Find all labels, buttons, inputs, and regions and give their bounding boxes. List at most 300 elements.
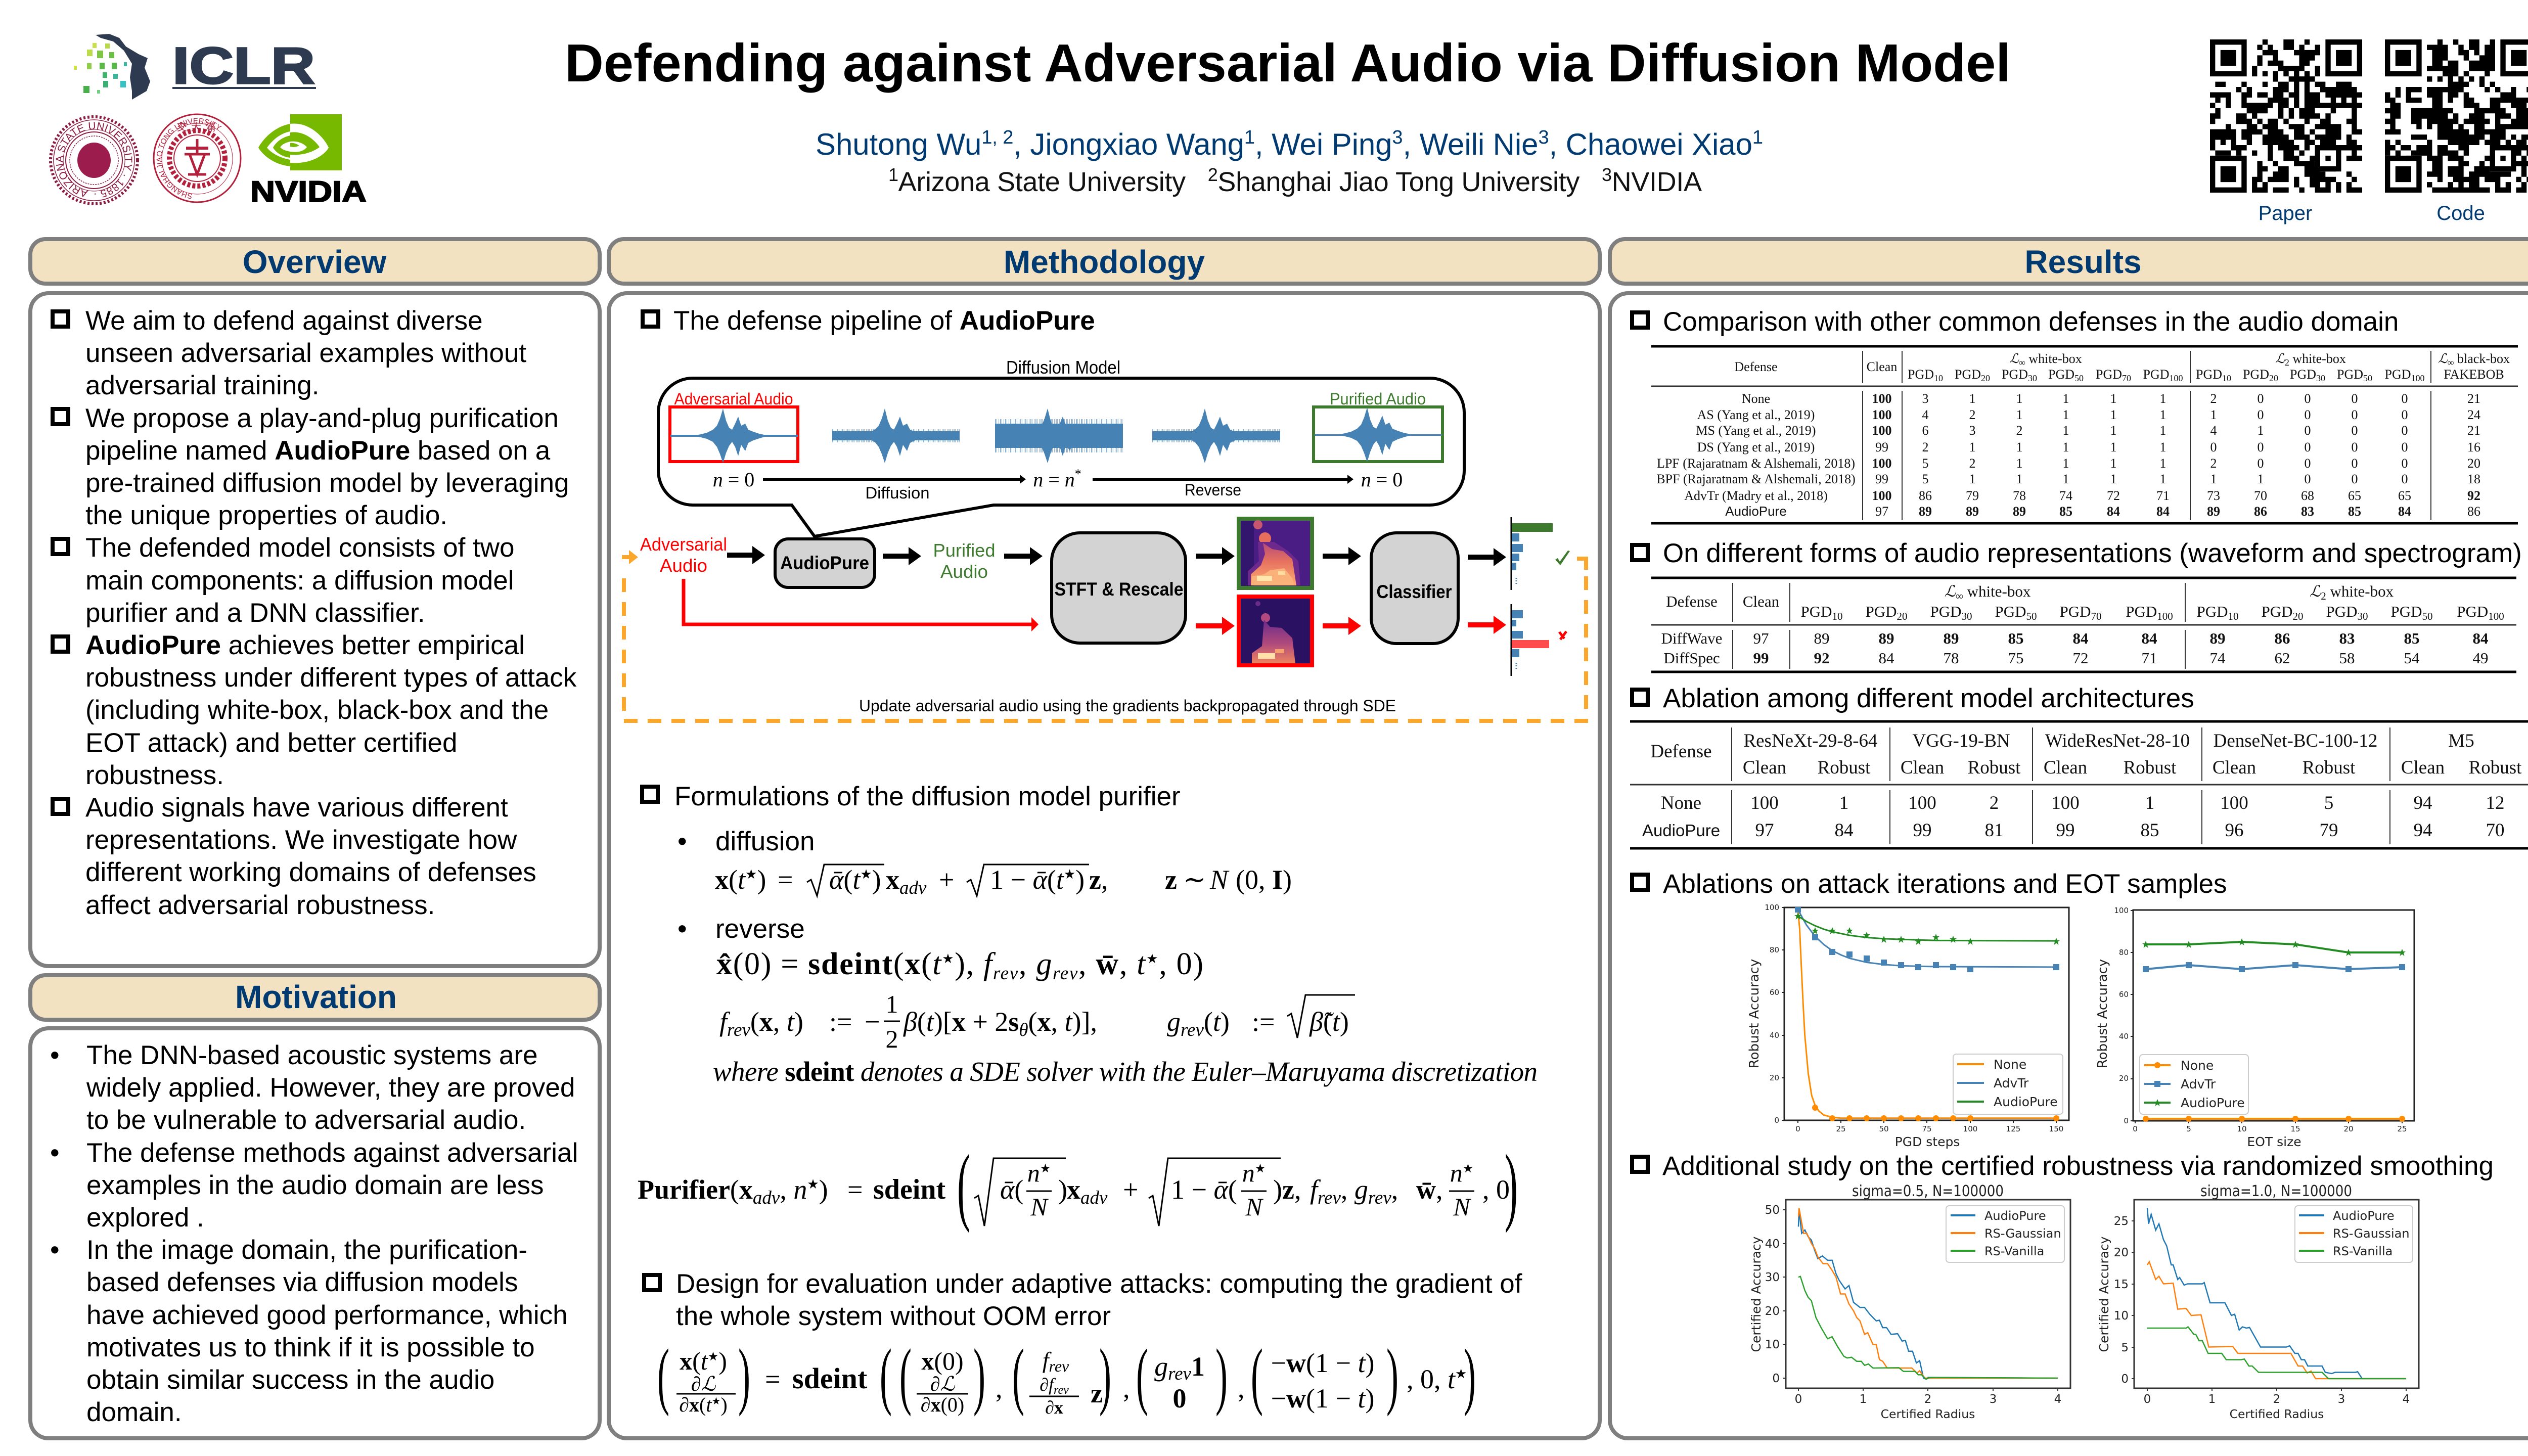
table: comparison: 1 — [2063, 472, 2069, 486]
formula: reverse drift and diffusion: ( — [1204, 1007, 1213, 1037]
formula: augmented SDE: rev — [1168, 1363, 1192, 1384]
table: comparison: 85 — [2059, 504, 2072, 519]
table: comparison: 21 — [2467, 423, 2480, 438]
formula: augmented SDE: −w(1 − t) — [1271, 1348, 1374, 1378]
table: comparison: 100 — [2170, 373, 2183, 383]
legend: sigma 0.5 — [1946, 1206, 2064, 1262]
table: representations: 84 — [1879, 649, 1894, 667]
formula: diffusion — [715, 864, 1292, 898]
formula: augmented SDE: ∂ℒ — [691, 1373, 716, 1395]
table: comparison: 100 — [1872, 391, 1892, 406]
table: representations: 83 — [2339, 629, 2355, 647]
table: comparison: None — [1742, 391, 1770, 406]
table: representations: 99 — [1753, 649, 1769, 667]
table: comparison: 20 — [2467, 456, 2480, 471]
table: architectures: Clean — [1743, 757, 1786, 778]
label: Diffusion Model: Diffusion Model — [1006, 357, 1120, 378]
text block: motivation bullets: • — [50, 1235, 60, 1265]
formula: purifier: f — [1310, 1174, 1321, 1205]
legend: sigma 1.0: RS-Vanilla — [2333, 1244, 2392, 1258]
table: comparison: ℒ — [2009, 351, 2019, 366]
text block: motivation bullets: obtain similar success in the audio — [86, 1365, 494, 1395]
table: comparison: 74 — [2059, 488, 2072, 503]
table: representations: 84 — [2472, 629, 2489, 647]
table: comparison: 1 — [2016, 407, 2022, 422]
formula: purifier: ) — [1058, 1174, 1067, 1205]
section heading: adaptive attacks: the whole system without OOM error — [676, 1301, 1111, 1331]
table: representations: 100 — [2488, 610, 2504, 622]
section heading: certified robustness: Additional study on the certified robustness via randomized smoothing — [1662, 1151, 2494, 1181]
table: architectures: Robust — [1968, 757, 2021, 778]
table: comparison: 70 — [2254, 488, 2267, 503]
formula: purifier: ★ — [1463, 1162, 1473, 1175]
label: purified audio wave: Purified Audio — [1330, 390, 1426, 408]
formula: diffusion: z — [1089, 864, 1101, 895]
table: comparison: PGD — [2196, 367, 2222, 382]
line chart: sigma 1.0: 0 — [2144, 1393, 2151, 1406]
formula: reverse drift and diffusion: β̃ — [1309, 1007, 1334, 1037]
section heading: pipeline: The defense pipeline of AudioPure — [673, 306, 1095, 336]
formula: purifier: ᾱ — [1000, 1174, 1015, 1205]
table: comparison: 4 — [2210, 423, 2217, 438]
box: Classifier — [1371, 533, 1458, 644]
caption: update rule: Update adversarial audio using the gradients backpropagated through SDE — [859, 697, 1396, 715]
table: representations: 78 — [1944, 649, 1959, 667]
table: comparison: 1 — [2063, 440, 2069, 454]
table: comparison: 0 — [2351, 407, 2358, 422]
table: representations: PGD — [2126, 603, 2157, 620]
icon: Shanghai Jiao Tong University seal: 交大滿 — [177, 121, 219, 133]
table: comparison: ∞ — [2448, 357, 2454, 368]
table: representations: PGD — [2261, 603, 2293, 620]
text block: motivation bullets: motivates us to think if it is possible to — [86, 1333, 535, 1362]
formula: reverse sdeint: , 0) — [1159, 947, 1203, 981]
table: comparison: 85 — [2348, 504, 2361, 519]
legend: EOT chart: AdvTr — [2181, 1077, 2216, 1091]
text block: motivation bullets: to be vulnerable to adversarial audio. — [86, 1105, 526, 1135]
table: comparison: PGD — [2243, 367, 2269, 382]
title: Defending against Adversarial Audio via Diffusion Model — [565, 33, 2011, 93]
table: comparison: 1 — [2160, 423, 2166, 438]
table: comparison: white-box — [2289, 351, 2346, 366]
formula: purifier: + — [1123, 1174, 1138, 1205]
text block: motivation bullets: The defense methods against adversarial — [86, 1138, 578, 1168]
line chart: PGD steps: 60 — [1770, 988, 1779, 997]
text block: overview bullets: Audio signals have various different — [85, 793, 508, 823]
table: comparison: PGD — [1955, 367, 1981, 382]
table: representations: PGD — [2390, 603, 2422, 620]
line chart: sigma 0.5: 2 — [1924, 1393, 1931, 1406]
table: architectures: 84 — [1834, 820, 1854, 841]
authors: Shutong Wu — [816, 127, 981, 161]
icon: ICLR logo — [74, 34, 316, 100]
formula: diffusion: z — [1165, 864, 1177, 895]
formula: reverse drift and diffusion: := — [1252, 1007, 1275, 1037]
table: comparison: PGD — [2048, 367, 2074, 382]
authors: , Chaowei Xiao — [1549, 127, 1752, 161]
table: representations: PGD — [1930, 603, 1962, 620]
formula: purifier: ᾱ( — [1213, 1174, 1237, 1205]
table: comparison: BPF (Rajaratnam & Alshemali, 2018) — [1656, 472, 1856, 486]
table: comparison: 2 — [2210, 391, 2217, 406]
table: representations: white-box — [1963, 582, 2031, 600]
formula: purifier: x — [1067, 1174, 1080, 1205]
table: comparison: DS (Yang et al., 2019) — [1697, 440, 1815, 454]
text: reverse bullet: • — [678, 914, 687, 944]
table: comparison: 1 — [1969, 440, 1976, 454]
table: representations: 62 — [2274, 649, 2290, 667]
table: representations: PGD — [2059, 603, 2091, 620]
text block: overview bullets: purifier and a DNN classifier. — [85, 598, 425, 628]
formula: purifier: g — [1355, 1174, 1368, 1205]
line chart: EOT size: 15 — [2290, 1124, 2300, 1133]
table: representations: Defense — [1666, 593, 1718, 610]
line chart: EOT size: EOT size — [2247, 1134, 2301, 1149]
formula: reverse sdeint: w̄, t — [1096, 947, 1146, 981]
formula: purifier: N — [1245, 1193, 1263, 1221]
table: comparison: 89 — [1919, 504, 1932, 519]
table: comparison: AudioPure — [1725, 504, 1787, 519]
table: comparison: 100 — [1872, 488, 1892, 503]
table: comparison: 1 — [2063, 407, 2069, 422]
table: comparison: 99 — [1875, 440, 1888, 454]
line chart: PGD steps: 20 — [1770, 1073, 1779, 1082]
table: architectures: 85 — [2141, 820, 2159, 841]
text block: motivation bullets: examples in the audio domain are less — [86, 1170, 544, 1200]
text block: overview bullets: the unique properties of audio. — [85, 500, 447, 530]
authors: 3 — [1392, 127, 1403, 148]
table: comparison: 1 — [2063, 423, 2069, 438]
icon: NVIDIA logo — [250, 114, 367, 208]
line chart: PGD steps: Robust Accuracy — [1747, 959, 1762, 1068]
authors: 1, 2 — [981, 127, 1013, 148]
table: representations: 10 — [2228, 610, 2239, 622]
section heading: attack iterations: Ablations on attack iterations and EOT samples — [1663, 869, 2227, 899]
arrow: classifier to purified output — [1468, 548, 1506, 566]
table: comparison: 18 — [2467, 472, 2480, 486]
timeline: diffusion and reverse — [713, 467, 1403, 502]
formula: diffusion: ∼ — [1183, 864, 1206, 895]
table: architectures: WideResNet-28-10 — [2045, 731, 2190, 751]
formula: augmented SDE: t — [1448, 1364, 1456, 1394]
panel: Results — [1610, 293, 2528, 1438]
text block: motivation bullets: widely applied. However, they are proved — [86, 1073, 575, 1103]
table: comparison: 0 — [2402, 407, 2408, 422]
text block: overview bullets: pre-trained diffusion model by leveraging — [85, 468, 569, 498]
table: comparison: 30 — [2316, 373, 2325, 383]
formula: augmented SDE: rev — [1049, 1357, 1069, 1375]
line chart: PGD steps: 40 — [1770, 1031, 1779, 1040]
table: architectures: 94 — [2414, 793, 2432, 813]
table: comparison: PGD — [2002, 367, 2028, 382]
formula: augmented SDE: ) — [720, 1393, 728, 1416]
line chart: EOT size: 80 — [2119, 948, 2129, 957]
table: architectures: 2 — [1990, 793, 1999, 813]
table: comparison: 79 — [1966, 488, 1979, 503]
formula: augmented SDE: , 0, — [1407, 1364, 1448, 1394]
table: architectures: 100 — [2051, 793, 2080, 813]
icon: NVIDIA logo: NVIDIA — [250, 175, 367, 208]
formula: purifier: ) — [819, 1174, 828, 1205]
formula: purifier: Purifier — [638, 1174, 730, 1205]
table: representations — [1651, 578, 2516, 672]
formula: augmented SDE: ) — [1386, 1334, 1398, 1417]
table: representations: 89 — [1814, 629, 1829, 647]
line chart: sigma 1.0 — [2097, 1182, 2419, 1421]
table: comparison: 0 — [2351, 440, 2358, 454]
table: comparison: 65 — [2398, 488, 2411, 503]
table: comparison: 1 — [2160, 472, 2166, 486]
formula: diffusion: (0, — [1236, 864, 1272, 895]
table: comparison: 1 — [2160, 440, 2166, 454]
table: comparison — [1651, 346, 2518, 523]
table: architectures: 1 — [1839, 793, 1848, 813]
table: representations: 100 — [2157, 610, 2173, 622]
line chart: sigma 1.0: 10 — [2114, 1309, 2129, 1323]
formula: augmented SDE: ∂f — [1040, 1375, 1056, 1395]
formula: reverse sdeint: rev — [1053, 963, 1078, 984]
text block: overview bullets: (including white-box, black-box and the — [85, 695, 549, 725]
table: architectures: Clean — [2044, 757, 2087, 778]
table: architectures: Clean — [2213, 757, 2256, 778]
formula: reverse drift and diffusion — [719, 990, 1355, 1053]
table: representations: 50 — [2422, 610, 2433, 622]
table: architectures: 99 — [2056, 820, 2075, 841]
formula: purifier: ★ — [1255, 1162, 1266, 1175]
table: comparison: 0 — [2351, 423, 2358, 438]
text block: motivation bullets: based defenses via diffusion models — [86, 1267, 518, 1297]
table: comparison: 1 — [2210, 407, 2217, 422]
formula: augmented SDE: , — [1123, 1373, 1130, 1403]
arrow: AudioPure to purified — [883, 547, 921, 565]
formula: augmented SDE: ★ — [1455, 1367, 1467, 1381]
panel: Methodology — [609, 293, 1600, 1438]
spectrogram: adversarial — [1239, 597, 1312, 665]
formula: augmented SDE: ★ — [708, 1350, 718, 1363]
formula: reverse sdeint: g — [1036, 947, 1052, 981]
formula: augmented SDE: ) — [973, 1334, 985, 1417]
formula: diffusion: x — [886, 864, 899, 895]
legend: PGD chart: AdvTr — [1994, 1076, 2029, 1090]
formula: diffusion: + — [939, 864, 954, 895]
table: architectures: Robust — [2124, 757, 2177, 778]
table: representations: 30 — [1962, 610, 1972, 622]
table: comparison: 1 — [2160, 391, 2166, 406]
table: comparison: 0 — [2305, 472, 2311, 486]
line chart: EOT size: 100 — [2114, 906, 2129, 915]
label: Code: Code — [2436, 202, 2485, 224]
icon: QR code paper — [2210, 42, 2362, 190]
line chart: PGD steps — [1747, 903, 2069, 1149]
table: representations: 89 — [1944, 629, 1959, 647]
table: representations: 75 — [2008, 649, 2023, 667]
table: comparison: 99 — [1875, 472, 1888, 486]
line chart: EOT size: 0 — [2133, 1124, 2138, 1133]
table: comparison: 0 — [2351, 472, 2358, 486]
table: representations: ℒ — [1945, 582, 1956, 600]
line chart: PGD steps: 150 — [2049, 1124, 2063, 1133]
label: Purified Audio: Purified — [933, 540, 995, 561]
table: comparison: PGD — [1908, 367, 1934, 382]
table: representations: 84 — [2073, 629, 2088, 647]
formula: purifier: , — [1391, 1174, 1405, 1205]
formula: reverse drift and diffusion: f — [719, 1007, 731, 1037]
table: comparison: 1 — [2160, 456, 2166, 471]
formula: augmented SDE: ( — [1251, 1334, 1263, 1417]
text block: overview bullets: AudioPure achieves better empirical — [85, 630, 525, 660]
formula: purifier: = — [847, 1174, 863, 1205]
table: comparison: AdvTr (Madry et al., 2018) — [1684, 488, 1828, 503]
formula: augmented SDE: ★ — [711, 1396, 720, 1407]
table: architectures — [1630, 721, 2528, 848]
formula: purifier: adv — [1080, 1188, 1108, 1208]
table: architectures: 96 — [2225, 820, 2244, 841]
affiliations: 1 — [888, 164, 898, 185]
timeline: diffusion and reverse: Reverse — [1185, 481, 1241, 499]
legend: sigma 0.5: AudioPure — [1984, 1209, 2046, 1223]
text block: overview bullets — [53, 306, 577, 920]
table: architectures: Clean — [2401, 757, 2445, 778]
affiliations: 3 — [1602, 164, 1612, 185]
formula: reverse sdeint: rev — [993, 963, 1018, 984]
formula: reverse drift and diffusion: − — [865, 1007, 880, 1037]
table: comparison: 1 — [2257, 423, 2264, 438]
line chart: sigma 1.0: sigma=1.0, N=100000 — [2200, 1182, 2352, 1200]
text block: motivation bullets: domain. — [86, 1397, 182, 1427]
formula: augmented SDE: ( — [1012, 1334, 1024, 1417]
table: comparison: black-box — [2454, 351, 2510, 366]
formula: diffusion: ) — [872, 864, 881, 895]
table: architectures: 12 — [2486, 793, 2505, 813]
table: comparison: 100 — [1872, 456, 1892, 471]
line chart: sigma 1.0: Certified Radius — [2230, 1407, 2324, 1421]
table: comparison: LPF (Rajaratnam & Alshemali, 2018) — [1657, 456, 1855, 471]
authors: , Jiongxiao Wang — [1013, 127, 1244, 161]
formula: reverse drift and diffusion: 2 — [886, 1025, 898, 1053]
legend: EOT chart — [2140, 1055, 2248, 1114]
timeline: diffusion and reverse: * — [1075, 467, 1081, 481]
formula: reverse drift and diffusion: rev — [727, 1020, 750, 1040]
box: AudioPure: AudioPure — [780, 553, 869, 573]
waveform: diffused — [832, 408, 960, 463]
line chart: EOT size: 0 — [2124, 1116, 2129, 1125]
label: Paper: Paper — [2259, 202, 2312, 224]
affiliations: NVIDIA — [1612, 167, 1702, 197]
table: comparison: PGD — [2337, 367, 2363, 382]
line chart: PGD steps: 50 — [1879, 1124, 1889, 1133]
table: comparison: 100 — [2411, 373, 2425, 383]
table: comparison: 24 — [2467, 407, 2480, 422]
table: comparison: MS (Yang et al., 2019) — [1696, 423, 1816, 438]
line chart: sigma 1.0: 4 — [2403, 1393, 2410, 1406]
line chart: sigma 0.5: 3 — [1990, 1393, 1997, 1406]
table: representations: 2 — [2321, 590, 2326, 602]
table: representations: 97 — [1753, 629, 1769, 647]
table: comparison: 0 — [2257, 456, 2264, 471]
affiliations: 2 — [1208, 164, 1218, 185]
legend: PGD chart: None — [1994, 1057, 2026, 1072]
formula: purifier: N — [1453, 1193, 1471, 1221]
formula: diffusion: (t — [729, 864, 745, 895]
formula: reverse sdeint: ★ — [1146, 951, 1158, 966]
table: comparison: 100 — [1872, 423, 1892, 438]
line chart: sigma 1.0: 15 — [2114, 1278, 2129, 1291]
formula: diffusion: I) — [1272, 864, 1292, 895]
table: comparison: Defense — [1734, 359, 1778, 374]
table: comparison: 1 — [2110, 456, 2116, 471]
table: comparison: Clean — [1867, 359, 1897, 374]
table: comparison: 100 — [1872, 407, 1892, 422]
formula: purifier: N — [1030, 1193, 1049, 1221]
line chart: EOT size: 10 — [2237, 1124, 2247, 1133]
heading: Results: Results — [2024, 244, 2142, 280]
table: representations: DiffSpec — [1663, 649, 1720, 667]
label: purified audio wave — [1314, 390, 1442, 462]
formula: purifier: , — [1436, 1174, 1443, 1205]
formula: purifier: adv — [753, 1188, 780, 1208]
formula: purifier: rev — [1368, 1188, 1391, 1208]
formula: purifier: n — [1450, 1159, 1463, 1187]
table: representations: PGD — [1995, 603, 2026, 620]
table: comparison: 73 — [2207, 488, 2220, 503]
table: representations: PGD — [2326, 603, 2358, 620]
text block: overview bullets: unseen adversarial examples without — [85, 338, 526, 368]
legend: PGD chart: AudioPure — [1994, 1095, 2058, 1109]
formula: reverse drift and diffusion: 1 — [886, 990, 898, 1018]
formula: diffusion: (t — [843, 864, 860, 895]
table: representations: white-box — [2326, 582, 2394, 600]
formula: purifier: , — [780, 1174, 793, 1205]
line chart: sigma 1.0: 5 — [2121, 1341, 2129, 1354]
authors: 3 — [1538, 127, 1549, 148]
formula: augmented SDE: ∂x(t — [679, 1393, 711, 1416]
table: architectures: VGG-19-BN — [1912, 731, 2010, 751]
arrow: adversarial to AudioPure — [727, 546, 765, 564]
formula: augmented SDE: ( — [880, 1334, 892, 1417]
formula: diffusion: , — [1101, 864, 1108, 895]
line chart: EOT size: 20 — [2119, 1074, 2129, 1083]
box: AudioPure — [775, 539, 875, 587]
text block: overview bullets: robustness. — [85, 760, 224, 790]
table: comparison: 10 — [2222, 373, 2231, 383]
waveform: reverse — [1152, 408, 1280, 463]
table: comparison: 1 — [2063, 391, 2069, 406]
legend: sigma 1.0: RS-Gaussian — [2333, 1226, 2410, 1241]
table: representations: PGD — [1800, 603, 1832, 620]
formula: augmented SDE: ( — [899, 1334, 912, 1417]
table: comparison: 84 — [2398, 504, 2411, 519]
formula: purifier: ★ — [1040, 1162, 1051, 1175]
table: comparison: 78 — [2013, 488, 2026, 503]
table: architectures: Robust — [1818, 757, 1871, 778]
line chart: PGD steps: 75 — [1922, 1124, 1932, 1133]
formula: purifier: rev — [1318, 1188, 1341, 1208]
table: comparison: 0 — [2402, 423, 2408, 438]
table: comparison: 1 — [2110, 391, 2116, 406]
text block: motivation bullets: • — [50, 1138, 60, 1168]
line chart: sigma 0.5 — [1749, 1182, 2070, 1421]
formula: diffusion: 1 − — [990, 864, 1032, 895]
table: comparison: 1 — [2016, 456, 2022, 471]
table: architectures: Robust — [2303, 757, 2356, 778]
table: comparison: AS (Yang et al., 2019) — [1697, 407, 1815, 422]
table: comparison: 0 — [2257, 391, 2264, 406]
table: architectures: 99 — [1913, 820, 1931, 841]
formula: augmented SDE: 1 — [1191, 1351, 1205, 1382]
table: representations: 20 — [1897, 610, 1908, 622]
legend: EOT chart: AudioPure — [2181, 1096, 2245, 1110]
formula: diffusion: ) — [1075, 864, 1085, 895]
